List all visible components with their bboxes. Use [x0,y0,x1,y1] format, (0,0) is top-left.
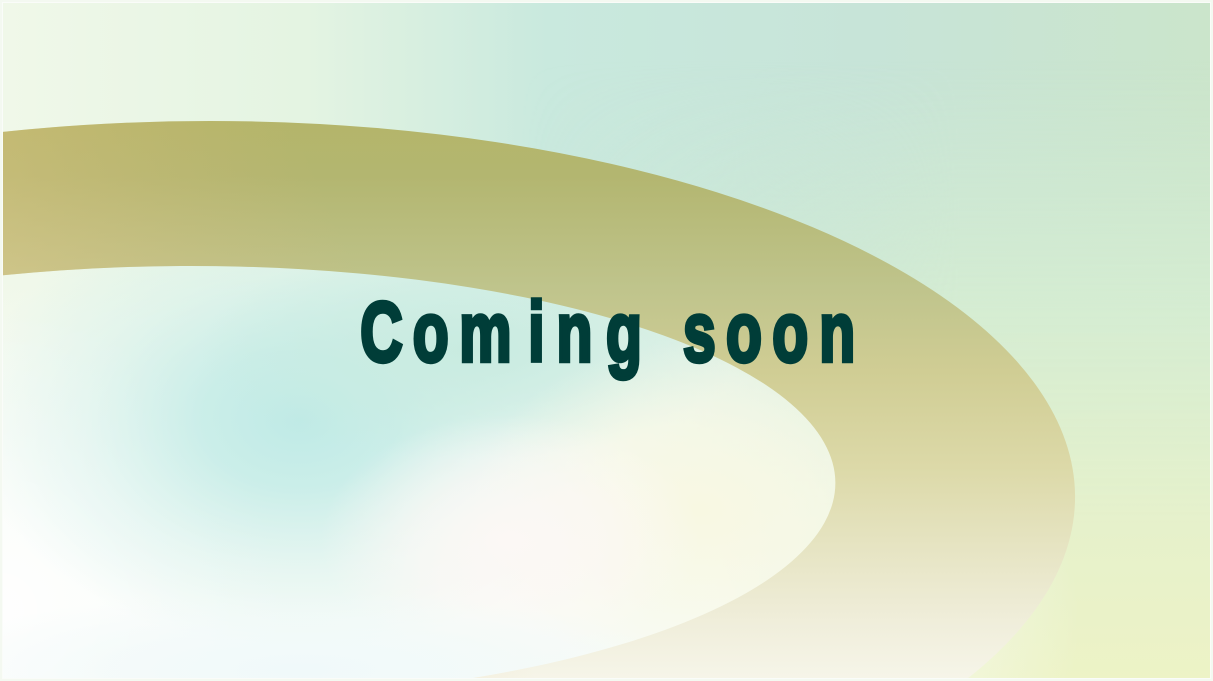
curved ribbon band [3,121,1075,678]
title: Coming soon [360,286,855,380]
